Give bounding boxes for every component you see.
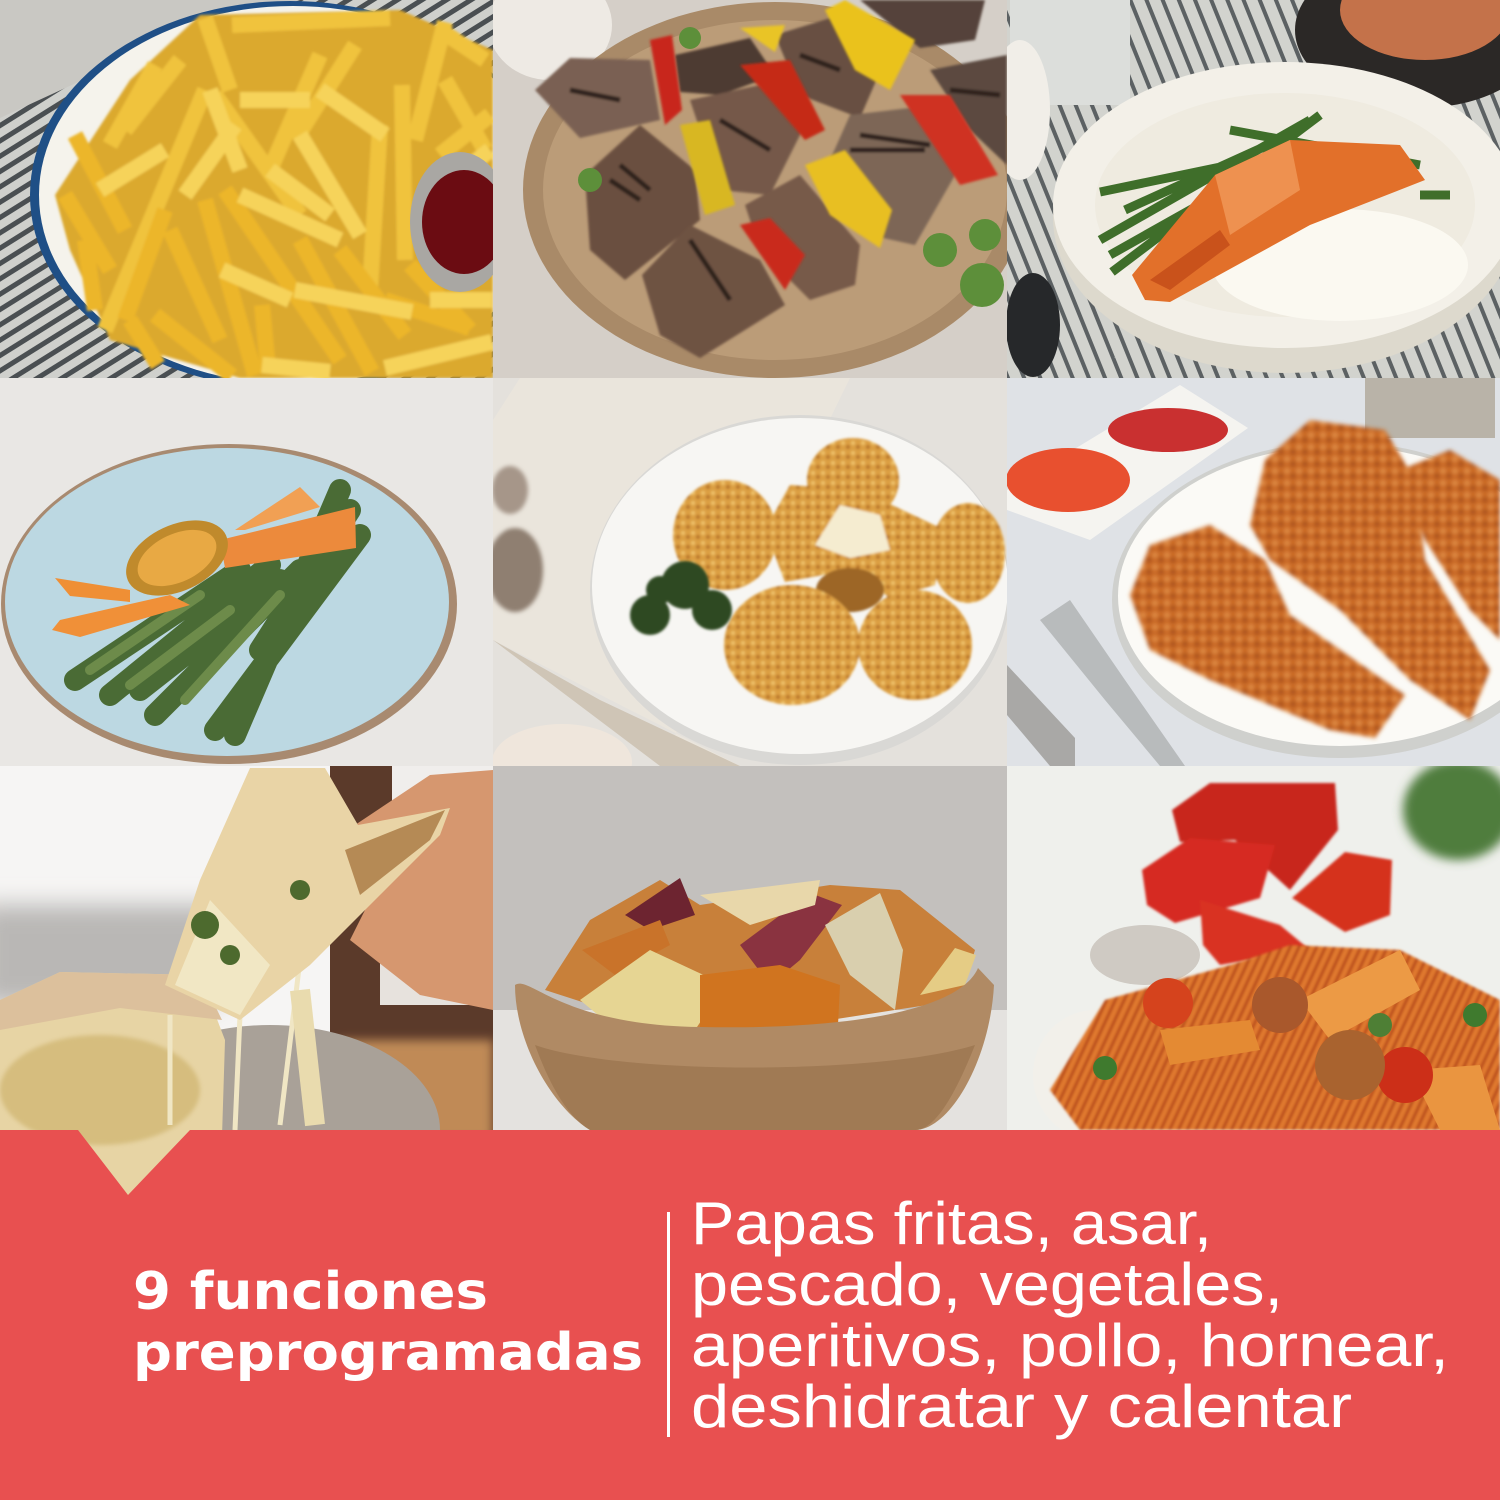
text block: function list: pescado, vegetales,	[691, 1251, 1283, 1318]
cilantro	[578, 27, 1004, 307]
green beans	[1100, 115, 1450, 272]
sauce ramekin	[410, 152, 493, 292]
panel: asparagus with carrots photo	[0, 378, 493, 766]
asparagus	[75, 490, 360, 735]
side bowl	[1007, 40, 1050, 180]
heading: 9 funciones preprogramadas: preprogramadas	[133, 1323, 643, 1383]
text block: function list: deshidratar y calentar	[691, 1373, 1352, 1440]
naan slice	[165, 768, 450, 1020]
panel: salmon with rice photo	[990, 0, 1500, 378]
pasta pile	[1050, 945, 1500, 1130]
white board	[493, 378, 850, 766]
panel: penne with tomato photo	[1007, 760, 1500, 1140]
cheese centre	[815, 505, 890, 558]
pinecones	[487, 528, 543, 612]
plate	[1112, 442, 1500, 758]
panel: vegetable chips photo	[493, 766, 1007, 1130]
small dish	[493, 724, 632, 766]
herb sprig background	[1403, 760, 1500, 860]
salmon	[1132, 140, 1425, 302]
plate	[1, 444, 457, 764]
meat chunks	[535, 0, 1007, 358]
plate	[30, 1, 493, 378]
white plate	[590, 415, 1010, 765]
chips	[545, 878, 976, 1040]
towel	[488, 0, 612, 80]
wooden bowl	[515, 968, 994, 1130]
background haze	[0, 905, 220, 1005]
tomatoes	[1142, 783, 1392, 965]
plate	[100, 1025, 440, 1235]
sauce dish	[1007, 385, 1248, 540]
shaker	[1365, 378, 1495, 438]
pizza	[0, 972, 225, 1200]
panel: fried chicken photo	[1006, 378, 1500, 766]
fork	[1040, 600, 1185, 766]
heading: 9 funciones preprogramadas	[133, 1262, 643, 1383]
striped cloth	[0, 0, 493, 378]
knife	[1007, 665, 1075, 766]
text block: function list: aperitivos, pollo, hornear,	[691, 1312, 1449, 1379]
white dish	[1033, 1010, 1157, 1140]
wooden plate	[523, 2, 1027, 378]
hand	[350, 770, 493, 1010]
text block: function list: Papas fritas, asar,	[691, 1190, 1212, 1257]
grey disc	[1090, 925, 1200, 985]
herbs	[191, 880, 310, 965]
chicken pieces	[1130, 420, 1500, 738]
croquettes	[673, 438, 1005, 705]
panel: croquettes photo	[487, 378, 1010, 800]
peppers	[650, 0, 998, 290]
carrots	[220, 507, 356, 568]
white bowl	[1053, 209, 1500, 373]
fries pile	[55, 10, 493, 378]
parsley	[630, 561, 732, 635]
panel: naan with melted cheese photo	[0, 766, 493, 1235]
lemon slice	[126, 520, 228, 596]
rice	[1212, 209, 1468, 321]
vertical divider	[667, 1212, 670, 1437]
grill marks	[570, 55, 1000, 300]
glass	[1010, 0, 1130, 105]
cheese strands	[170, 960, 315, 1130]
panel: grilled meat skewers photo	[488, 0, 1027, 378]
panel: french fries photo	[0, 0, 493, 378]
heading: 9 funciones preprogramadas: 9 funciones	[133, 1262, 488, 1322]
red banner with notch	[0, 1130, 1500, 1500]
dark pan	[1295, 0, 1500, 108]
text block: function list	[691, 1190, 1449, 1440]
